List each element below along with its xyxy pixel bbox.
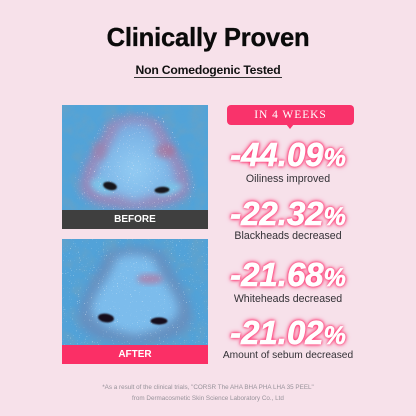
stat: whiteheads <box>228 256 349 305</box>
caption: Blackheads decreased <box>234 230 342 242</box>
badge label: IN 4 WEEKS <box>254 109 327 121</box>
value: -22.32% <box>230 195 346 232</box>
after label bar: AFTER <box>118 349 152 360</box>
stat: oiliness <box>228 136 349 185</box>
before label bar: BEFORE <box>114 214 156 225</box>
badge label <box>227 105 354 125</box>
footnote: from Dermacosmetic Skin Science Laboratory Co., Ltd <box>132 395 284 402</box>
subtitle: Non Comedogenic Tested <box>135 63 281 77</box>
nose image after <box>62 239 208 345</box>
badge: in 4 weeks <box>227 105 354 129</box>
panel: before photo <box>62 105 208 229</box>
footnote <box>102 384 314 402</box>
caption: Oiliness improved <box>246 173 330 185</box>
stat: sebum <box>223 314 353 361</box>
badge pointer <box>286 124 294 129</box>
value: -21.68% <box>230 256 346 293</box>
before label bar <box>62 210 208 229</box>
caption: Whiteheads decreased <box>234 293 342 305</box>
value: -21.02% <box>230 314 346 351</box>
stat: blackheads <box>228 195 349 242</box>
nose image before <box>62 105 208 210</box>
after label bar <box>62 345 208 364</box>
caption: Amount of sebum decreased <box>223 350 353 361</box>
footnote: *As a result of the clinical trials, "CORSR The AHA BHA PHA LHA 35 PEEL" <box>102 384 314 391</box>
value: -44.09% <box>230 136 346 173</box>
title: Clinically Proven <box>107 24 309 52</box>
panel: after photo <box>62 239 208 364</box>
